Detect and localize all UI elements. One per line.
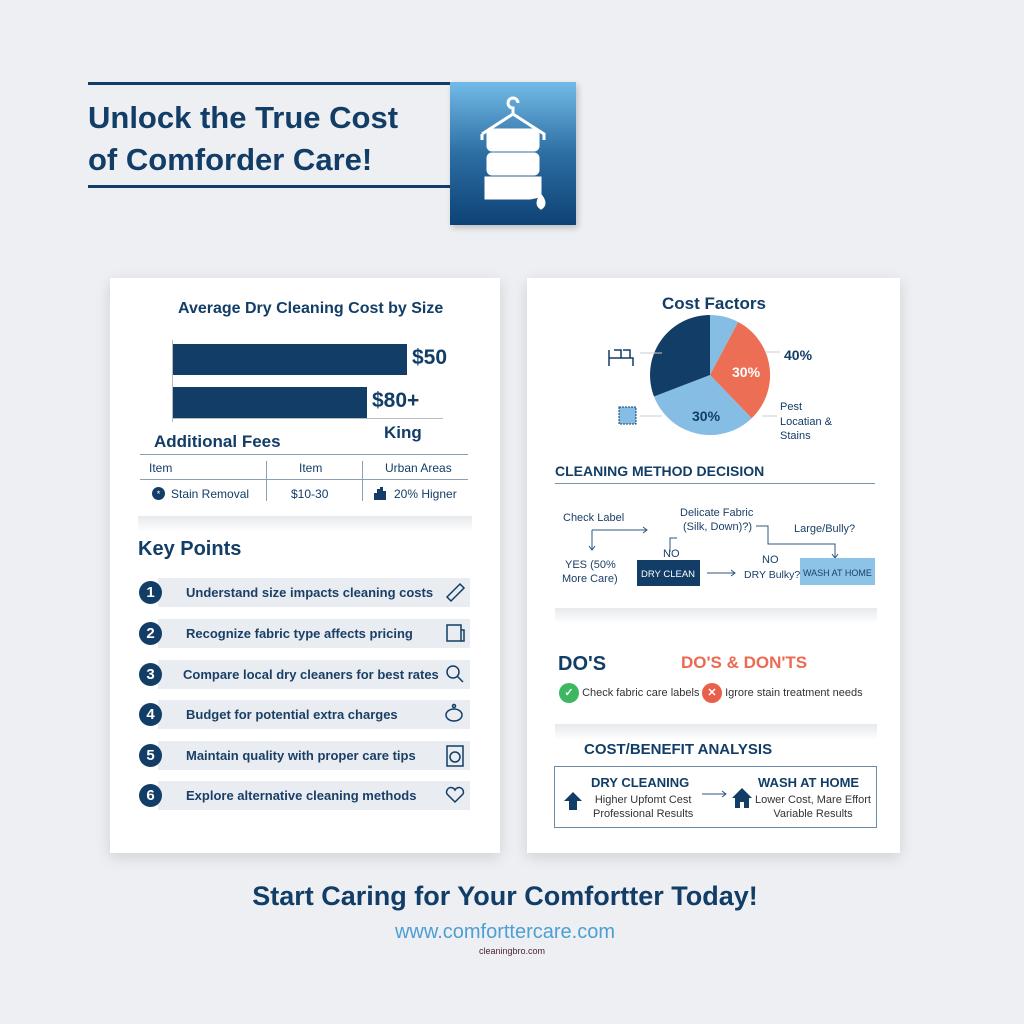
cost benefit box: Lower Cost, Mare Effort: [755, 794, 871, 806]
table: fees: $10-30: [291, 487, 328, 501]
pie chart: 40%: [784, 347, 813, 363]
pie chart: [608, 315, 833, 442]
flowchart: [562, 507, 875, 586]
heading cost/benefit: COST/BENEFIT ANALYSIS: [584, 741, 772, 758]
heading cleaning method decision: [555, 463, 875, 484]
flowchart: NO: [663, 548, 680, 560]
flowchart: Delicate Fabric: [680, 507, 754, 519]
flowchart: More Care): [562, 573, 618, 585]
table: fees: *: [157, 489, 160, 499]
pie chart: Pest: [780, 401, 802, 413]
heading do's: DO'S: [558, 653, 606, 675]
table: fees: Item: [299, 461, 322, 475]
table: fees: Stain Removal: [171, 487, 249, 501]
flowchart: (Silk, Down)?): [683, 521, 752, 533]
cost benefit box: WASH AT HOME: [758, 775, 859, 790]
title: [88, 100, 398, 177]
table: fees: 20% Higner: [394, 487, 457, 501]
heading key points: Key Points: [138, 538, 241, 560]
flowchart: YES (50%: [565, 559, 616, 571]
key point list: 2: [146, 625, 155, 642]
panel: right: [527, 278, 900, 853]
header lines: [88, 82, 452, 188]
cost benefit box: Variable Results: [773, 808, 853, 820]
table: fees: [140, 454, 468, 504]
bar chart: $50: [412, 346, 447, 369]
table: fees: Item: [149, 461, 172, 475]
flowchart: DRY Bulky?: [744, 569, 800, 581]
key point list: Explore alternative cleaning methods: [186, 788, 416, 803]
title: Unlock the True Cost: [88, 100, 398, 135]
heading do's & don'ts: DO'S & DON'TS: [681, 653, 807, 672]
title: of Comforder Care!: [88, 142, 372, 177]
footer url: www.comforttercare.com: [395, 921, 615, 943]
icon: comforter on hanger: [450, 82, 576, 225]
key point list: [139, 578, 470, 810]
flowchart: WASH AT HOME: [803, 568, 872, 578]
pie title: Cost Factors: [662, 294, 766, 313]
footer credit: cleaningbro.com: [479, 946, 545, 956]
bar chart: [172, 340, 447, 422]
panel: left: [110, 278, 500, 853]
bar chart title: Average Dry Cleaning Cost by Size: [178, 300, 443, 317]
pie chart: Locatian &: [780, 416, 833, 428]
key point list: 3: [146, 666, 155, 683]
key point list: Compare local dry cleaners for best rates: [183, 667, 439, 682]
pie chart: 30%: [692, 408, 721, 424]
flowchart: Check Label: [563, 512, 624, 524]
don't item: Igrore stain treatment needs: [725, 687, 863, 699]
cost benefit box: DRY CLEANING: [591, 775, 689, 790]
do item: [559, 683, 700, 703]
flowchart: Large/Bully?: [794, 523, 855, 535]
do item: ✓: [564, 687, 574, 699]
heading additional fees: Additional Fees: [154, 432, 281, 451]
key point list: Understand size impacts cleaning costs: [186, 585, 433, 600]
don't item: ✕: [707, 687, 717, 699]
key point list: Recognize fabric type affects pricing: [186, 626, 413, 641]
key point list: 1: [146, 584, 155, 601]
pie chart: 30%: [732, 364, 761, 380]
table: fees: Urban Areas: [385, 461, 452, 475]
key point list: 5: [146, 747, 155, 764]
don't item: [702, 683, 863, 703]
key point list: Budget for potential extra charges: [186, 707, 398, 722]
bar chart: $80+: [372, 389, 419, 412]
label king: King: [384, 423, 422, 442]
flowchart: DRY CLEAN: [641, 569, 695, 580]
do item: Check fabric care labels: [582, 687, 699, 699]
cost benefit box: Higher Upfomt Cest: [595, 794, 691, 806]
key point list: Maintain quality with proper care tips: [186, 748, 416, 763]
cost benefit box: Professional Results: [593, 808, 693, 820]
pie chart: Stains: [780, 430, 811, 442]
key point list: 4: [146, 706, 155, 723]
key point list: 6: [146, 787, 155, 804]
footer call to action: Start Caring for Your Comfortter Today!: [252, 881, 758, 911]
heading cleaning method decision: CLEANING METHOD DECISION: [555, 463, 764, 479]
flowchart: NO: [762, 554, 779, 566]
cost benefit box: [554, 766, 877, 828]
